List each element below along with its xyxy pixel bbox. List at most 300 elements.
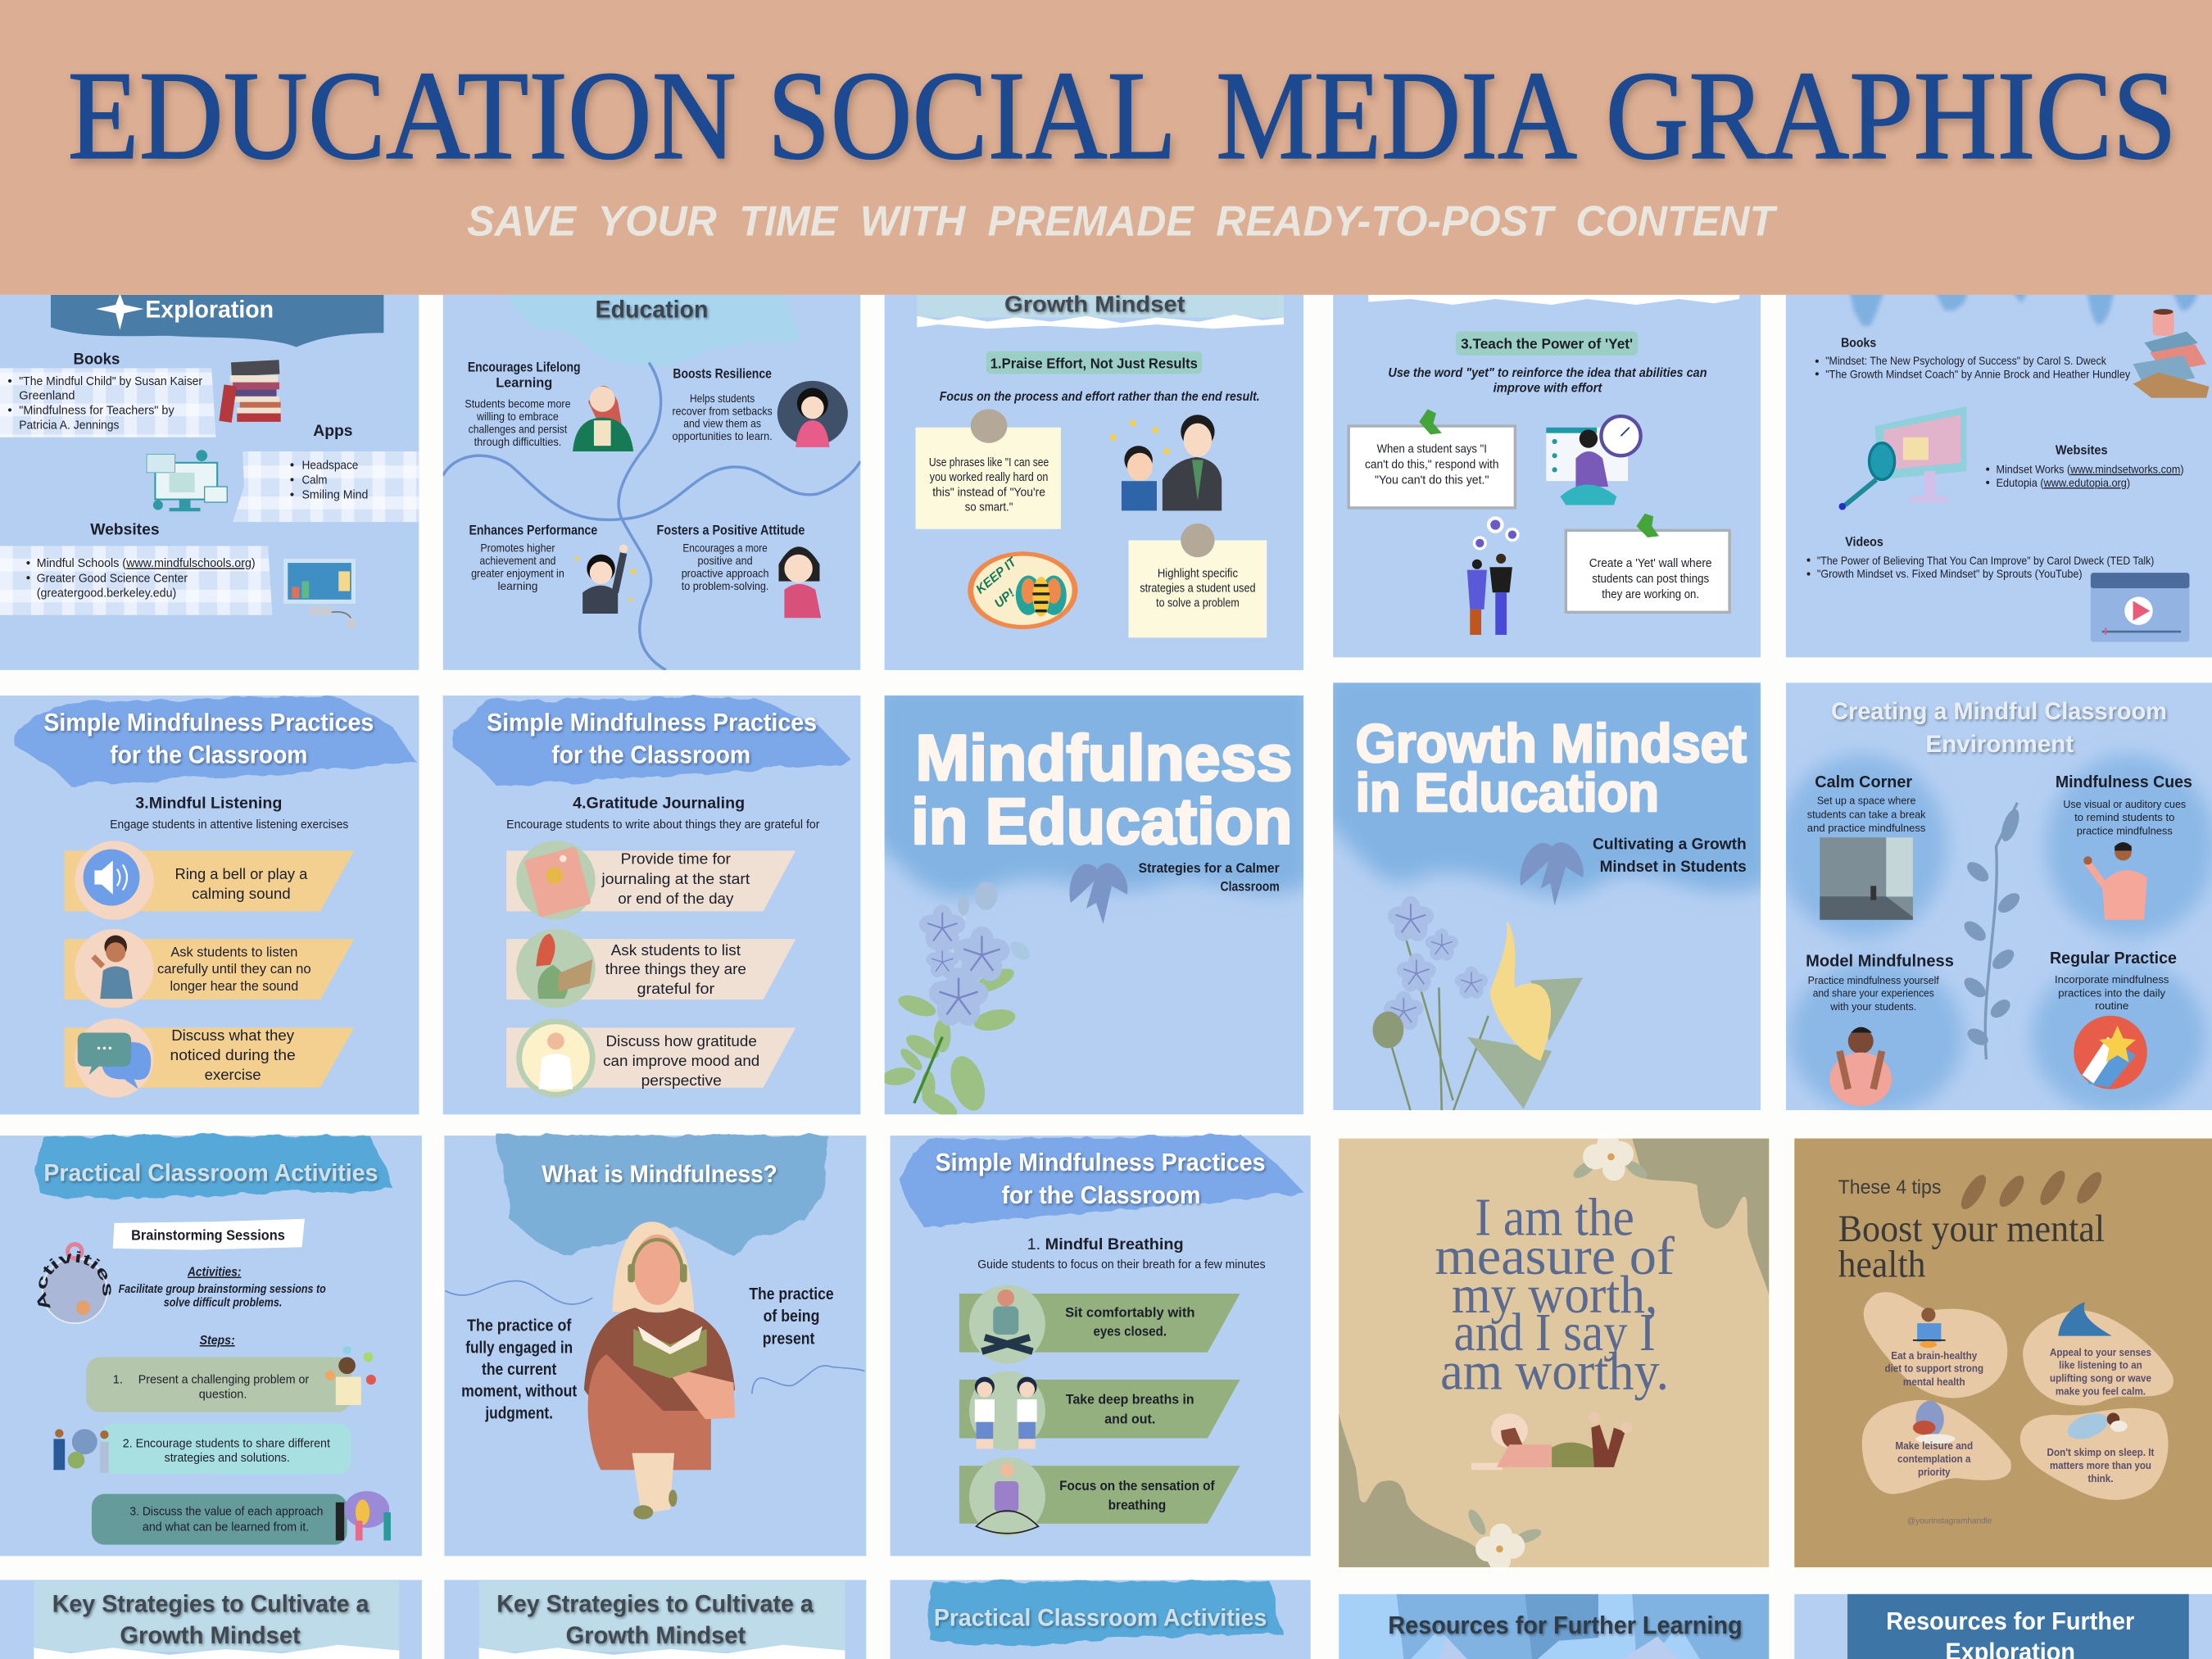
text: use the word yet: Use the word "yet" to reinforce the idea that abilities can (1388, 366, 1707, 380)
banner: simple mindfulness practices: for the Classroom (1002, 1182, 1200, 1209)
icon: video player (2091, 573, 2189, 641)
decoration: leaf sprig (1960, 803, 2023, 1059)
step: take deep breaths: Take deep breaths in (1066, 1392, 1194, 1407)
step: discuss gratitude: can improve mood and (603, 1053, 759, 1069)
icon: stack of books (219, 360, 281, 423)
olive corner shapes (1339, 1139, 1769, 1567)
text: activities description: solve difficult problems. (164, 1297, 282, 1310)
note: create a yet wall (1566, 514, 1729, 612)
panel: gratitude journaling (443, 696, 860, 1114)
list: websites: Greater Good Science Center (37, 572, 188, 585)
banner: simple mindfulness practices: Simple Mindfulness Practices (43, 709, 374, 737)
text: fosters a positive attitude: Encourages a more (682, 542, 768, 554)
list: apps (233, 451, 419, 522)
list: growth mindset videos: "The Power of Believing That You Can Improve" by Carol Dweck (TED Talk) (1817, 555, 2154, 567)
step: discuss what they noticed: exercise (205, 1067, 261, 1083)
badge: keep it up butterfly (968, 551, 1078, 629)
step 1: present a challenge (86, 1358, 351, 1412)
title: mindfulness in education (911, 721, 1292, 858)
list: mindfulness books: "The Mindful Child" by Susan Kaiser (19, 375, 202, 388)
note: create a yet wall: they are working on. (1602, 588, 1699, 601)
note: use phrases (916, 409, 1061, 529)
tip blob: appeal to your senses: like listening to an (2059, 1360, 2142, 1371)
step: ring a bell (65, 841, 354, 920)
step: ask students to listen: longer hear the sound (170, 979, 298, 994)
banner: exploration: Exploration (145, 297, 274, 323)
step: discuss gratitude (506, 1018, 796, 1098)
step: ask students to list: grateful for (637, 981, 714, 997)
text: encourages lifelong learning: Encourages Lifelong (468, 360, 581, 375)
icon: teacher and boy (1110, 415, 1222, 510)
list: websites (0, 546, 272, 615)
step: take deep breaths (959, 1371, 1240, 1450)
tip blob: appeal to your senses (2023, 1302, 2173, 1406)
icon: ribbon (1069, 863, 1127, 924)
note: create a yet wall: Create a 'Yet' wall where (1589, 557, 1712, 570)
panel: what is mindfulness (444, 1135, 866, 1556)
icon: colleagues with targets (1467, 516, 1520, 635)
text: practice of fully engaged: the current (482, 1360, 556, 1379)
banner: simple mindfulness practices (17, 697, 416, 786)
title (68, 45, 2177, 186)
text: calm corner: Set up a space where (1817, 795, 1915, 807)
note: use phrases: Use phrases like "I can see (929, 456, 1049, 469)
text: calm corner: and practice mindfulness (1807, 822, 1925, 834)
text: mindfulness cues: Use visual or auditory cues (2063, 798, 2186, 810)
icon: ribbon (1520, 842, 1584, 905)
heading: steps: Steps: (200, 1334, 235, 1348)
heading: creating a mindful classroom (1831, 699, 2167, 758)
affirmation text: measure of (1435, 1227, 1675, 1286)
text: encourages lifelong learning: challenges and persist (469, 424, 567, 436)
text: instagram handle: @yourinstagramhandle (1907, 1517, 1992, 1526)
watercolor wash (875, 684, 1312, 896)
banner: education watercolor (510, 289, 801, 365)
banner: practical classroom activities: Practical Classroom Activities (934, 1606, 1267, 1632)
panel: mindfulness resources for exploration (0, 289, 419, 670)
icon: team with lightbulb (336, 1491, 391, 1540)
banner: simple mindfulness practices: Simple Mindfulness Practices (487, 709, 817, 737)
heading: creating a mindful classroom: Creating a Mindful Classroom (1831, 699, 2167, 725)
tip blob: leisure and contemplation (1862, 1400, 2011, 1494)
heading: videos: Videos (1845, 535, 1883, 549)
text: regular practice: practices into the daily (2058, 987, 2166, 999)
heading: boost your mental health: Boost your mental (1838, 1208, 2105, 1250)
step: provide time: Provide time for (621, 851, 731, 868)
text: boosts resilience (673, 366, 773, 442)
watercolor blobs (1778, 755, 2212, 1114)
note: use phrases: this" instead of "You're (932, 486, 1045, 499)
label: teach the power of yet: 3.Teach the Power of 'Yet' (1461, 335, 1633, 351)
step: discuss what they noticed (65, 1018, 354, 1098)
step: sit comfortably: Sit comfortably with (1065, 1305, 1194, 1320)
text: enhances performance: Enhances Performance (469, 524, 597, 538)
title: growth mindset in education: in Education (1356, 763, 1659, 823)
banner: key strategies: Growth Mindset (566, 1623, 746, 1649)
title: growth mindset in education: Growth Mindset (1356, 714, 1747, 773)
banner: what is mindfulness: What is Mindfulness? (542, 1162, 777, 1188)
badge: activities circle: Activities (37, 1251, 111, 1308)
banner: resources for further exploration: Resources for Further (1886, 1607, 2134, 1635)
text: regular practice (2050, 949, 2177, 1012)
tip blob: don't skimp on sleep: matters more than you (2050, 1460, 2151, 1471)
panel: resources for further exploration (1794, 1594, 2212, 1659)
banner: exploration (51, 289, 383, 347)
heading: mindful breathing: 1. Mindful Breathing (1027, 1235, 1184, 1253)
heading: boost your mental health: health (1838, 1244, 1925, 1285)
step: sit comfortably (959, 1285, 1240, 1364)
title: mindfulness in education: Mindfulness (916, 721, 1292, 794)
badge: keep it up butterfly: UP! (992, 587, 1018, 611)
text: encourages lifelong learning (465, 360, 581, 448)
banner: key strategies (479, 1581, 845, 1659)
list: growth mindset websites: Mindset Works (www.mindsetworks.com) (1997, 464, 2184, 476)
icon: desktop computer (283, 559, 356, 629)
banner: key strategies: Key Strategies to Cultivate a (52, 1591, 369, 1617)
note: when a student says: "You can't do this yet." (1375, 474, 1489, 487)
step: take deep breaths: and out. (1104, 1412, 1155, 1426)
banner: resources for further exploration (1847, 1594, 2189, 1659)
text: use the word yet (1388, 366, 1707, 396)
panel: key strategies middle (444, 1580, 866, 1659)
text: strategies for a calmer classroom (1139, 861, 1280, 894)
icon: book stack with mug (2133, 309, 2210, 398)
text: activities description: Facilitate group brainstorming sessions to (119, 1283, 326, 1296)
text: practice of being present: The practice (749, 1285, 834, 1303)
text: model mindfulness (1806, 952, 1954, 1013)
icon: monitor dashboard (147, 450, 227, 511)
step: sit comfortably: eyes closed. (1094, 1325, 1167, 1339)
text: mindfulness cues: Mindfulness Cues (2056, 773, 2192, 791)
panel: practical classroom activities (0, 1133, 422, 1557)
text: practice of fully engaged (461, 1317, 577, 1423)
text: model mindfulness: Practice mindfulness yourself (1808, 974, 1939, 986)
step 2: encourage students: strategies and solutions. (165, 1452, 290, 1465)
list: apps: Calm (301, 474, 327, 487)
text: practice of fully engaged: fully engaged in (465, 1338, 573, 1357)
icon: top flower (1571, 1133, 1650, 1181)
list: websites: Mindful Schools (www.mindfulschools.org) (37, 557, 256, 570)
banner: simple mindfulness practices: for the Classroom (110, 742, 307, 769)
list: mindfulness books: "Mindfulness for Teachers" by (19, 405, 175, 418)
step: provide time (506, 841, 796, 920)
tip blob: brain-healthy diet: diet to support strong (1885, 1363, 1983, 1375)
text: enhances performance (469, 524, 597, 592)
heading: gratitude journaling: 4.Gratitude Journaling (573, 795, 745, 813)
affirmation text: am worthy. (1440, 1342, 1669, 1401)
list: growth mindset websites: Edutopia (www.edutopia.org) (1997, 477, 2130, 489)
text: model mindfulness: and share your experiences (1813, 987, 1934, 999)
step 3: discuss the value: 3. Discuss the value of each approach (129, 1505, 323, 1518)
icon: student with checklist and clock (1546, 416, 1641, 505)
step: focus on sensation (959, 1457, 1240, 1536)
text: enhances performance: greater enjoyment in (471, 567, 564, 579)
text: enhances performance: Promotes higher (480, 542, 555, 554)
heading: apps: Apps (313, 423, 352, 440)
badge: keep it up butterfly: KEEP IT (973, 555, 1020, 596)
step: focus on sensation: breathing (1108, 1498, 1166, 1512)
list: growth mindset books: "The Growth Mindset Coach" by Annie Brock and Heather Hundley (1825, 368, 2130, 380)
banner: simple mindfulness practices (453, 697, 854, 786)
banner: simple mindfulness practices: Simple Mindfulness Practices (936, 1149, 1266, 1176)
text: mindfulness cues (2056, 773, 2192, 837)
tip blob: brain-healthy diet: mental health (1903, 1376, 1965, 1388)
banner: simple mindfulness practices: for the Classroom (551, 742, 750, 769)
header band (0, 0, 2212, 295)
text: calm corner: Calm Corner (1815, 773, 1912, 791)
tip blob: don't skimp on sleep: think. (2087, 1473, 2113, 1484)
panel: teach the power of yet (1333, 289, 1761, 657)
icon: girl in rain cloud (777, 381, 848, 447)
text: enhances performance: achievement and (479, 555, 555, 567)
list: mindfulness books: Greenland (19, 389, 75, 402)
banner: what is mindfulness (498, 1135, 828, 1256)
step: ask students to list: Ask students to list (611, 942, 741, 959)
banner: practical classroom activities: Practical Classroom Activities (43, 1160, 378, 1186)
text: encourages lifelong learning: willing to embrace (476, 410, 559, 423)
text: activities description (119, 1265, 326, 1310)
step: discuss what they noticed: Discuss what they (171, 1027, 294, 1044)
text: practice of being present: of being (764, 1307, 819, 1326)
note: use phrases: so smart." (965, 501, 1013, 514)
text: enhances performance: learning (497, 580, 537, 592)
text: fosters a positive attitude: proactive approach (682, 567, 768, 579)
text: boosts resilience: Boosts Resilience (673, 366, 772, 381)
step: ask students to listen: Ask students to listen (170, 945, 297, 959)
tip blob: don't skimp on sleep: Don't skimp on sleep. It (2047, 1447, 2155, 1458)
text: cultivating a growth mindset: Mindset in Students (1600, 859, 1747, 876)
banner: practical classroom activities (35, 1135, 393, 1200)
banner: practical classroom activities (927, 1581, 1282, 1647)
icon: student with notepad (573, 386, 633, 451)
panel: creating a mindful classroom environment (1778, 682, 2212, 1114)
step 1: present a challenge: 1. (113, 1373, 123, 1386)
label: brainstorming sessions: Brainstorming Sessions (131, 1227, 285, 1244)
text: strategies for a calmer classroom: Strategies for a Calmer (1139, 861, 1280, 876)
text: fosters a positive attitude: positive and (697, 555, 753, 567)
panel: mindful listening (0, 696, 419, 1114)
text: boosts resilience: and view them as (683, 418, 761, 430)
dividing curves (443, 363, 860, 670)
title: growth mindset in education (1356, 714, 1747, 823)
text: model mindfulness: with your students. (1829, 1000, 1916, 1013)
icon: calm girl (779, 546, 821, 618)
text: model mindfulness: Model Mindfulness (1806, 952, 1954, 971)
step: ask students to list: three things they are (605, 961, 746, 977)
step: discuss gratitude: Discuss how gratitude (606, 1033, 757, 1049)
decorative brush strokes (1956, 1167, 2106, 1213)
tip blob: appeal to your senses: make you feel calm. (2056, 1386, 2146, 1398)
title: mindfulness in education: in Education (911, 785, 1292, 858)
note: use phrases: you worked really hard on (930, 471, 1048, 484)
note: highlight strategies: Highlight specific (1158, 567, 1238, 580)
note: when a student says: can't do this," respond with (1365, 459, 1499, 472)
tip blob: appeal to your senses: uplifting song or wave (2050, 1373, 2151, 1385)
panel: i am worthy affirmation (1339, 1133, 1769, 1571)
text: fosters a positive attitude (657, 524, 805, 592)
step: discuss what they noticed: noticed during the (170, 1047, 296, 1063)
list: growth mindset books: "Mindset: The New Psychology of Success" by Carol S. Dweck (1825, 355, 2106, 367)
tip blob: appeal to your senses: Appeal to your senses (2050, 1347, 2151, 1358)
affirmation text: I am the (1475, 1189, 1634, 1248)
text: fosters a positive attitude: to problem-solving. (682, 580, 768, 592)
text: guide students: Guide students to focus on their breath for a few minutes (977, 1258, 1266, 1271)
title: SOCIAL (768, 45, 1176, 186)
banner: growth mindset torn paper (917, 289, 1284, 329)
text: focus on the process: Focus on the process and effort rather than the end result. (940, 390, 1260, 404)
text: boosts resilience: recover from setbacks (673, 405, 773, 417)
text: calm corner (1807, 773, 1926, 834)
brush background (1397, 1594, 1769, 1659)
affirmation text: and I say I (1453, 1303, 1656, 1362)
text: activities description: Activities: (187, 1265, 241, 1279)
badge: keep practicing (2074, 1016, 2147, 1089)
text: strategies for a calmer classroom: Classroom (1220, 879, 1280, 894)
note: highlight strategies: to solve a problem (1156, 596, 1240, 610)
panel: benefits of mindfulness in education (443, 289, 860, 670)
torn paper strip (1368, 289, 1739, 305)
text: mindfulness cues: to remind students to (2074, 811, 2174, 823)
text: regular practice: Incorporate mindfulness (2055, 973, 2169, 986)
panel: growth mindset praise effort (885, 289, 1303, 670)
text: encourages lifelong learning: Learning (496, 376, 552, 391)
step 1: present a challenge: question. (199, 1388, 247, 1401)
text: encourage students: Encourage students to write about things they are grateful for (506, 818, 820, 832)
text: cultivating a growth mindset (1593, 836, 1747, 876)
step: focus on sensation: Focus on the sensation of (1059, 1479, 1215, 1494)
heading: mindful listening: 3.Mindful Listening (135, 795, 282, 813)
banner: key strategies (34, 1581, 399, 1659)
icon: boy thinking with puzzle (325, 1346, 376, 1405)
tip blob: brain-healthy diet (1864, 1292, 2007, 1398)
tip blob: don't skimp on sleep (2020, 1408, 2169, 1500)
text: use the word yet: improve with effort (1494, 382, 1602, 396)
step 1: present a challenge: Present a challenging problem or (138, 1373, 309, 1386)
panel: practical classroom activities bottom (891, 1580, 1311, 1659)
icon: person pointing (2083, 842, 2147, 920)
label: praise effort: 1.Praise Effort, Not Just Results (990, 355, 1198, 371)
heading: creating a mindful classroom: Environment (1925, 732, 2074, 758)
text: boosts resilience: opportunities to learn. (673, 430, 773, 442)
affirmation text (1435, 1189, 1675, 1401)
step 2: encourage students (102, 1423, 351, 1474)
tip blob: leisure and contemplation: priority (1918, 1466, 1951, 1478)
decorative waves (445, 1281, 865, 1394)
panel: growth mindset in education cover (1323, 672, 1770, 1112)
panel: mindful breathing (891, 1135, 1311, 1556)
text: cultivating a growth mindset: Cultivating a Growth (1593, 836, 1747, 854)
list: growth mindset books (1815, 355, 2130, 380)
list: apps: Smiling Mind (301, 489, 368, 502)
image: empty room with chair (1820, 837, 1913, 920)
illustration: blue and yellow flowers (1372, 896, 1583, 1112)
step: ask students to list (506, 929, 796, 1008)
note: create a yet wall: students can post things (1592, 573, 1709, 586)
illustration: person lying and writing (1471, 1412, 1632, 1470)
watercolor wash (1323, 672, 1770, 895)
watercolor drips (1849, 289, 2200, 326)
tip blob: leisure and contemplation: Make leisure and (1895, 1440, 1973, 1452)
text: practice of being present (749, 1285, 834, 1348)
banner: growth mindset torn paper: Growth Mindset (1004, 292, 1185, 317)
heading: books: Books (1841, 337, 1876, 351)
text: fosters a positive attitude: Fosters a Positive Attitude (657, 524, 805, 538)
step 3: discuss the value (92, 1494, 347, 1545)
text: boosts resilience: Helps students (690, 392, 755, 405)
step: ask students to listen: carefully until they can no (157, 962, 311, 977)
step: discuss gratitude: perspective (641, 1072, 722, 1089)
step: ring a bell: Ring a bell or play a (175, 866, 308, 882)
panel: boost your mental health tips (1794, 1139, 2212, 1567)
text: practice of fully engaged: The practice of (467, 1317, 571, 1335)
text: practice of fully engaged: moment, without (461, 1382, 577, 1401)
tip blob: brain-healthy diet: Eat a brain-healthy (1891, 1350, 1977, 1362)
heading: websites: Websites (2056, 443, 2108, 457)
text: regular practice: routine (2095, 999, 2128, 1012)
icon: cheering student (575, 545, 637, 614)
text: encourages lifelong learning: Students become more (465, 398, 571, 410)
list: growth mindset videos: "Growth Mindset vs. Fixed Mindset" by Sprouts (YouTube) (1817, 568, 2083, 580)
step: provide time: or end of the day (618, 891, 733, 907)
text: practice of being present: present (763, 1329, 815, 1348)
heading: websites: Websites (90, 522, 160, 539)
banner: simple mindfulness practices (899, 1135, 1303, 1227)
subtitle: SAVE YOUR TIME WITH PREMADE READY-TO-POST CONTENT (467, 197, 1779, 245)
panel: resources for further learning (1339, 1594, 1769, 1659)
list: growth mindset websites (1986, 464, 2184, 489)
label: brainstorming sessions (113, 1219, 305, 1250)
title: MEDIA (1216, 45, 1577, 186)
icon: team with puzzle pieces (53, 1429, 109, 1473)
text: practice of fully engaged: judgment. (485, 1404, 553, 1423)
panel: mindfulness in education cover (875, 684, 1312, 1122)
heading: boost your mental health (1838, 1208, 2105, 1285)
title: EDUCATION (68, 45, 737, 186)
note: when a student says: When a student says "I (1377, 443, 1487, 456)
list: websites: (greatergood.berkeley.edu) (37, 587, 176, 600)
note: when a student says (1349, 409, 1515, 508)
banner: education watercolor: Education (596, 297, 708, 323)
icon: person holding face (1829, 1027, 1892, 1106)
label: teach the power of yet (1456, 332, 1638, 356)
text: encourages lifelong learning: through difficulties. (474, 436, 561, 448)
note: highlight strategies (1129, 524, 1267, 637)
list: apps: Headspace (301, 460, 358, 473)
banner: key strategies: Growth Mindset (120, 1623, 301, 1649)
banner: key strategies: Key Strategies to Cultivate a (496, 1591, 814, 1617)
text: mindfulness cues: practice mindfulness (2077, 825, 2173, 837)
illustration: woman reading with headphones (584, 1222, 735, 1520)
heading: books: Books (74, 351, 120, 368)
list: mindfulness books (0, 368, 215, 437)
step: ask students to listen (65, 929, 354, 1008)
icon: presentation board with magnifier (1839, 406, 1966, 510)
list: mindfulness books: Patricia A. Jennings (19, 419, 120, 432)
text: engage students: Engage students in attentive listening exercises (110, 818, 348, 832)
icon: bottom flower (1465, 1507, 1543, 1571)
heading: resources for further learning: Resources for Further Learning (1388, 1611, 1743, 1639)
step: ring a bell: calming sound (192, 886, 291, 902)
text: calm corner: students can take a break (1807, 809, 1926, 821)
step 2: encourage students: 2. Encourage students to share different (123, 1438, 330, 1451)
text: these 4 tips: These 4 tips (1838, 1176, 1941, 1199)
tip blob: leisure and contemplation: contemplation a (1897, 1453, 1971, 1465)
illustration: blue flowers and leaves (881, 882, 1033, 1122)
step 3: discuss the value: and what can be learned from it. (143, 1521, 309, 1534)
list: growth mindset videos (1806, 555, 2154, 580)
panel: growth mindset resources (1786, 289, 2212, 657)
note: highlight strategies: strategies a student used (1140, 582, 1256, 595)
